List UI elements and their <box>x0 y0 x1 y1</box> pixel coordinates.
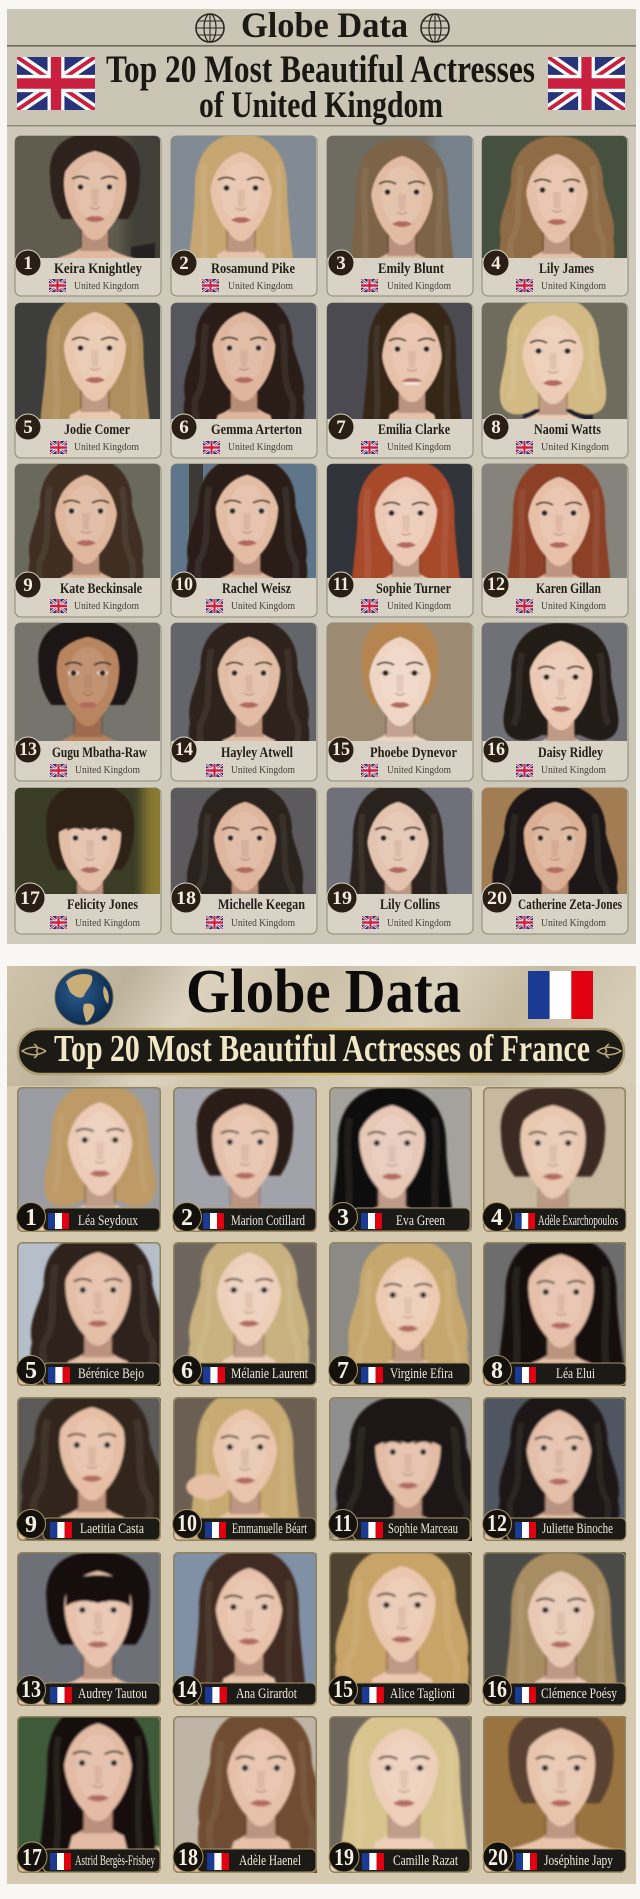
country row <box>206 599 295 613</box>
card 13: Audrey Tautou <box>12 1552 184 1750</box>
photo <box>173 1552 317 1706</box>
name bar: Sophie Marceau <box>388 1521 458 1537</box>
photo <box>329 1397 472 1541</box>
photo <box>15 464 160 578</box>
rank badge: 7 <box>337 1358 349 1384</box>
country row <box>516 279 606 292</box>
rank badge: 5 <box>23 417 33 438</box>
name bar <box>197 1849 316 1872</box>
photo <box>173 1087 317 1232</box>
rank badge: 12 <box>487 1511 507 1537</box>
country row: United Kingdom <box>74 441 139 453</box>
UK heading line 2: of United Kingdom <box>199 85 443 126</box>
country row <box>361 441 451 454</box>
photo <box>15 303 160 419</box>
country row <box>50 764 140 777</box>
name: Lily James <box>539 261 594 277</box>
photo <box>17 1397 161 1541</box>
country row <box>361 599 451 613</box>
rank badge <box>482 883 512 913</box>
rank badge: 2 <box>181 1205 193 1231</box>
card 1: Léa Seydoux <box>16 1083 184 1276</box>
UK header band <box>7 9 636 126</box>
rank badge <box>328 572 354 598</box>
rank badge <box>15 883 45 913</box>
name bar: Alice Taglioni <box>390 1686 455 1702</box>
country row: United Kingdom <box>74 280 139 292</box>
country row <box>50 599 139 613</box>
rank badge: 18 <box>176 888 196 909</box>
rank badge <box>482 1202 512 1232</box>
name: Hayley Atwell <box>221 745 293 761</box>
name bar <box>507 1683 626 1705</box>
name bar <box>197 1208 316 1231</box>
name: Emily Blunt <box>378 261 444 277</box>
rank badge <box>171 414 197 440</box>
name bar: Emmanuelle Béart <box>232 1521 308 1537</box>
card 2: Marion Cotillard <box>161 1085 329 1278</box>
rank badge: 13 <box>19 739 37 760</box>
name bar <box>353 1363 470 1385</box>
rank badge: 11 <box>333 574 349 595</box>
name bar <box>507 1208 626 1231</box>
ornament left <box>22 1044 46 1058</box>
rank badge: 9 <box>23 575 33 596</box>
country row <box>203 441 293 454</box>
photo <box>482 303 627 419</box>
country row <box>206 764 295 777</box>
country row: United Kingdom <box>541 764 606 776</box>
rank badge: 7 <box>336 417 346 438</box>
photo <box>329 1242 472 1386</box>
rank badge: 16 <box>487 1677 507 1703</box>
brand title: Globe Data <box>186 958 461 1026</box>
rank badge: 5 <box>25 1358 37 1384</box>
photo <box>171 464 316 578</box>
rank badge: 6 <box>179 417 189 438</box>
card 14: Hayley Atwell <box>170 622 318 782</box>
photo <box>173 1242 317 1386</box>
card 12: Karen Gillan <box>482 464 628 618</box>
panel: France <box>7 958 640 1899</box>
country row <box>362 916 451 929</box>
country row: United Kingdom <box>231 600 295 612</box>
rank badge <box>327 883 357 913</box>
name bar: Adèle Haenel <box>239 1853 301 1869</box>
rank badge: 14 <box>177 1677 197 1703</box>
photo <box>327 303 472 419</box>
rank badge <box>328 414 354 440</box>
photo <box>15 136 160 258</box>
country row: United Kingdom <box>75 917 140 929</box>
card 5: Jodie Comer <box>14 302 162 458</box>
card 15: Phoebe Dynevor <box>326 622 474 782</box>
name bar: Léa Seydoux <box>78 1213 138 1229</box>
name: Felicity Jones <box>67 897 138 913</box>
name bar <box>353 1849 470 1872</box>
name bar: Ana Girardot <box>236 1686 298 1702</box>
photo <box>17 1087 161 1232</box>
country row: United Kingdom <box>231 764 295 776</box>
card 16: Daisy Ridley <box>482 622 628 782</box>
photo <box>327 464 472 578</box>
country row <box>516 599 606 613</box>
photo <box>327 788 472 894</box>
photo <box>483 1716 626 1873</box>
name bar: Juliette Binoche <box>542 1521 613 1537</box>
name: Michelle Keegan <box>218 897 306 913</box>
country row: United Kingdom <box>541 917 606 929</box>
photo <box>17 1242 161 1386</box>
card 15: Alice Taglioni <box>316 1547 488 1745</box>
name: Gemma Arterton <box>211 422 303 438</box>
photo <box>15 788 160 894</box>
icon: French flag <box>528 971 593 1019</box>
rank badge: 4 <box>491 1205 503 1231</box>
rank badge <box>328 1356 358 1384</box>
card 5: Bérénice Bejo <box>14 1233 182 1426</box>
rank badge <box>15 572 41 598</box>
country row <box>361 764 451 777</box>
country row <box>50 916 140 929</box>
card 2: Rosamund Pike <box>170 136 318 296</box>
card 11: Sophie Turner <box>326 464 474 618</box>
name bar <box>353 1518 470 1540</box>
photo <box>329 1552 472 1706</box>
icon: left UK flag <box>17 57 95 110</box>
photo <box>173 1397 317 1541</box>
photo <box>15 623 160 741</box>
card 6: Gemma Arterton <box>170 302 318 458</box>
rank badge: 17 <box>20 888 41 909</box>
country row: United Kingdom <box>387 600 451 612</box>
rank badge <box>171 250 197 276</box>
rank badge: 19 <box>334 1845 354 1871</box>
rank badge <box>15 250 41 276</box>
photo <box>329 1087 472 1232</box>
country row <box>206 916 295 929</box>
name bar: Audrey Tautou <box>78 1686 147 1702</box>
name: Karen Gillan <box>536 581 601 597</box>
name bar <box>353 1683 470 1705</box>
name: Kate Beckinsale <box>60 581 142 597</box>
rank badge <box>171 883 201 913</box>
card 10: Rachel Weisz <box>170 464 318 618</box>
card 3: Emily Blunt <box>326 136 474 296</box>
rank badge: 8 <box>491 1358 503 1384</box>
rank badge: 10 <box>175 574 193 595</box>
name bar: Marion Cotillard <box>231 1213 305 1229</box>
photo <box>482 136 627 258</box>
rank badge: 16 <box>487 739 505 760</box>
card 4: Lily James <box>482 136 628 296</box>
rank badge: 1 <box>25 1205 37 1231</box>
country row: United Kingdom <box>75 764 140 776</box>
name bar <box>197 1363 316 1385</box>
name: Rachel Weisz <box>222 581 291 597</box>
rank badge <box>483 250 509 276</box>
card 19: Camille Razat <box>316 1709 492 1899</box>
card 16: Clémence Poésy <box>475 1552 640 1750</box>
rank badge: 9 <box>25 1512 37 1538</box>
rank badge: 6 <box>181 1358 193 1384</box>
card 7: Emilia Clarke <box>326 302 474 458</box>
name bar <box>353 1208 470 1231</box>
card 20: Joséphine Japy <box>473 1709 640 1899</box>
name bar: Astrid Bergès-Frisbey <box>75 1853 155 1869</box>
rank badge <box>17 1842 47 1872</box>
rank badge: 17 <box>22 1845 42 1871</box>
country row: United Kingdom <box>387 441 451 453</box>
name bar: Joséphine Japy <box>544 1853 613 1869</box>
card 9: Laetitia Casta <box>8 1388 176 1582</box>
name: Naomi Watts <box>534 422 601 438</box>
card 7: Virginie Efira <box>324 1238 492 1432</box>
name bar <box>43 1849 160 1872</box>
name: Jodie Comer <box>64 422 130 438</box>
name: Daisy Ridley <box>538 745 603 761</box>
name bar <box>507 1363 626 1385</box>
name bar <box>507 1518 626 1540</box>
rank badge <box>328 250 354 276</box>
rank badge: 18 <box>178 1845 198 1871</box>
country row: United Kingdom <box>541 441 609 453</box>
card 9: Kate Beckinsale <box>14 464 162 618</box>
country row: United Kingdom <box>74 600 139 612</box>
icon: right UK flag <box>548 57 625 110</box>
country row <box>49 279 139 292</box>
rank badge <box>16 1202 46 1232</box>
photo <box>483 1552 626 1706</box>
France header background <box>7 966 636 1086</box>
card 4: Adèle Exarchopoulos <box>469 1086 637 1280</box>
country row <box>361 279 451 292</box>
rank badge: 2 <box>179 253 189 274</box>
photo <box>171 136 316 258</box>
photo <box>171 303 316 419</box>
name: Lily Collins <box>380 897 440 913</box>
rank badge: 10 <box>177 1511 197 1537</box>
rank badge: 13 <box>21 1677 41 1703</box>
rank badge: 3 <box>337 1205 349 1231</box>
name bar <box>507 1849 626 1872</box>
card 20: Catherine Zeta-Jones <box>482 788 628 934</box>
name bar: Eva Green <box>396 1213 445 1229</box>
photo <box>483 1087 626 1232</box>
name bar: Camille Razat <box>393 1853 459 1869</box>
rank badge <box>482 1356 512 1384</box>
name bar <box>43 1363 160 1385</box>
card 1: Keira Knightley <box>14 136 162 296</box>
card 11: Sophie Marceau <box>324 1395 492 1588</box>
rank badge: 15 <box>332 739 350 760</box>
photo <box>482 464 627 578</box>
photo <box>171 788 316 894</box>
rank badge: 14 <box>175 739 193 760</box>
icon: right globe <box>421 14 449 42</box>
rank badge <box>171 737 197 763</box>
country row <box>202 279 293 292</box>
rank badge <box>171 572 197 598</box>
country row: United Kingdom <box>228 441 293 453</box>
photo <box>329 1716 472 1873</box>
name bar: Bérénice Bejo <box>78 1366 144 1382</box>
rank badge <box>483 737 509 763</box>
country row <box>516 916 606 929</box>
photo <box>173 1716 317 1873</box>
photo <box>482 623 627 741</box>
photo <box>17 1716 161 1873</box>
rank badge <box>328 1202 358 1232</box>
country row: United Kingdom <box>541 280 606 292</box>
icon: globe <box>55 969 113 1025</box>
photo <box>483 1242 626 1386</box>
rank badge: 15 <box>333 1677 353 1703</box>
rank badge <box>15 737 41 763</box>
name: Gugu Mbatha-Raw <box>52 745 147 761</box>
card 17: Felicity Jones <box>14 788 162 934</box>
card 17: Astrid Bergès-Frisbey <box>10 1704 186 1899</box>
rank badge <box>329 1842 359 1872</box>
card 18: Adèle Haenel <box>173 1709 349 1899</box>
photo <box>483 1397 626 1541</box>
name bar <box>43 1518 160 1540</box>
ornament right <box>597 1044 621 1058</box>
card 19: Lily Collins <box>326 788 474 934</box>
rank badge: 11 <box>334 1511 352 1537</box>
country row <box>516 441 609 454</box>
country row <box>516 764 606 777</box>
rank badge <box>328 737 354 763</box>
card 10: Emmanuelle Béart <box>161 1390 329 1584</box>
rank badge: 20 <box>488 1845 508 1871</box>
banner <box>18 1028 624 1074</box>
name: Sophie Turner <box>376 581 451 597</box>
rank badge <box>173 1842 203 1872</box>
name bar <box>197 1683 316 1705</box>
photo <box>327 623 472 741</box>
photo <box>482 788 627 894</box>
card 8: Naomi Watts <box>482 302 628 458</box>
rank badge <box>16 1356 46 1384</box>
UK heading line 1: Top 20 Most Beautiful Actresses <box>106 48 535 91</box>
name bar <box>197 1518 316 1540</box>
country row: United Kingdom <box>228 280 293 292</box>
card 6: Mélanie Laurent <box>165 1233 333 1426</box>
rank badge: 8 <box>491 417 501 438</box>
name bar: Clémence Poésy <box>541 1686 617 1702</box>
card 18: Michelle Keegan <box>170 788 318 934</box>
name bar: Laetitia Casta <box>80 1521 144 1537</box>
rank badge: 4 <box>491 253 501 274</box>
card 13: Gugu Mbatha-Raw <box>14 622 162 782</box>
name bar <box>43 1208 160 1231</box>
name bar <box>43 1683 160 1705</box>
rank badge: 19 <box>332 888 352 909</box>
rank badge <box>483 572 509 598</box>
rank badge: 3 <box>336 253 346 274</box>
name: Rosamund Pike <box>211 261 295 277</box>
country row: United Kingdom <box>541 600 606 612</box>
icon: left globe <box>196 14 224 42</box>
country row <box>50 441 139 454</box>
photo <box>17 1552 161 1706</box>
rank badge <box>16 1510 46 1538</box>
card 3: Eva Green <box>308 1086 476 1280</box>
rank badge <box>15 414 41 440</box>
card 8: Léa Elui <box>477 1235 640 1428</box>
name bar: Virginie Efira <box>390 1366 453 1382</box>
card 14: Ana Girardot <box>163 1549 335 1747</box>
name: Keira Knightley <box>54 261 142 277</box>
rank badge: 12 <box>487 574 505 595</box>
name bar: Mélanie Laurent <box>231 1366 309 1382</box>
card 12: Juliette Binoche <box>475 1391 640 1584</box>
photo <box>327 136 472 258</box>
rank badge <box>483 414 509 440</box>
name: Phoebe Dynevor <box>370 745 457 761</box>
rank badge <box>483 1842 513 1872</box>
brand title: Globe Data <box>241 5 408 45</box>
country row: United Kingdom <box>387 280 451 292</box>
name bar: Léa Elui <box>556 1366 595 1382</box>
rank badge <box>172 1202 202 1232</box>
panel: United Kingdom <box>6 5 640 968</box>
country row: United Kingdom <box>387 917 451 929</box>
country row: United Kingdom <box>387 764 451 776</box>
rank badge <box>172 1356 202 1384</box>
photo <box>171 623 316 741</box>
rank badge: 20 <box>487 888 507 909</box>
rank badge: 1 <box>23 253 33 274</box>
name: Emilia Clarke <box>378 422 450 438</box>
country row: United Kingdom <box>231 917 295 929</box>
